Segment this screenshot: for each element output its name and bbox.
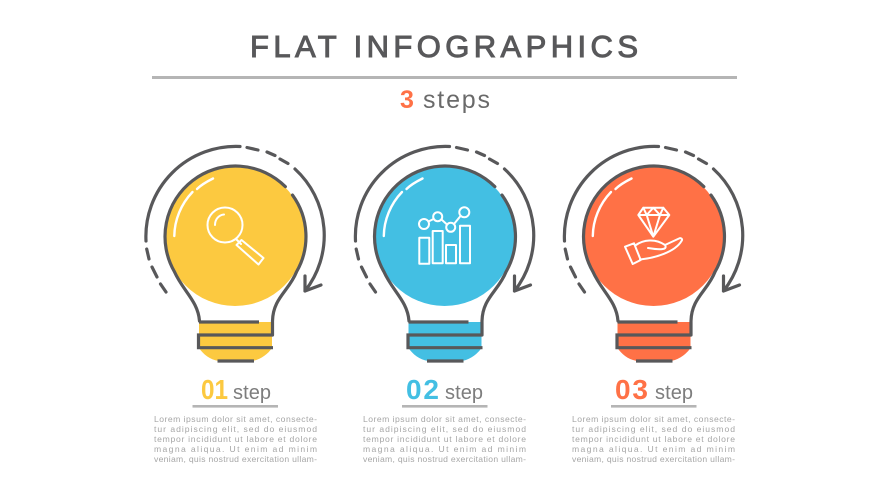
base fill — [199, 322, 272, 361]
screw thread — [617, 322, 692, 361]
step 3 label: step — [655, 382, 693, 404]
subtitle: steps — [423, 86, 490, 114]
glass fill — [165, 166, 305, 306]
glass highlight — [593, 178, 632, 236]
step 2 label: step — [445, 382, 483, 404]
step 2 text: Lorem ipsum dolor sit amet, consecte- — [363, 414, 526, 424]
step 1 text: tur adipiscing elit, sed do eiusmod — [154, 424, 317, 434]
bulb outline — [375, 166, 515, 335]
glass fill — [584, 166, 724, 306]
step 1 text: Lorem ipsum dolor sit amet, consecte- — [154, 414, 317, 424]
step 1 text: magna aliqua. Ut enim ad minim — [154, 444, 317, 454]
step 2 text: magna aliqua. Ut enim ad minim — [363, 444, 526, 454]
step 1 text: veniam, quis nostrud exercitation ullam- — [154, 454, 317, 464]
title rule — [152, 76, 737, 79]
step 1 label: step — [233, 382, 271, 404]
base fill — [408, 322, 482, 361]
step 3 text: tempor incididunt ut labore et dolore — [572, 434, 735, 444]
bulb outline — [584, 166, 724, 335]
screw thread — [408, 322, 482, 361]
icon: magnifier — [208, 208, 264, 264]
step 2 text — [363, 414, 526, 464]
step 3 text — [572, 414, 735, 464]
glass fill — [374, 166, 514, 306]
cycle arrow — [146, 146, 324, 292]
icon: chart — [419, 207, 470, 264]
step 3 number: 03 — [615, 374, 648, 405]
base fill — [618, 322, 690, 361]
screw thread — [198, 322, 273, 361]
step 1 rule — [192, 405, 278, 408]
step 1 number: 01 — [201, 374, 228, 405]
step 2 rule — [402, 405, 488, 408]
step 2 text: tempor incididunt ut labore et dolore — [363, 434, 526, 444]
step 2 number: 02 — [406, 374, 439, 405]
cycle arrow — [355, 146, 534, 292]
step 3 text: magna aliqua. Ut enim ad minim — [572, 444, 735, 454]
step 1 text — [154, 414, 317, 464]
step 2 text: veniam, quis nostrud exercitation ullam- — [363, 454, 526, 464]
subtitle: 3 — [400, 86, 414, 114]
step 3 text: Lorem ipsum dolor sit amet, consecte- — [572, 414, 735, 424]
cycle arrow — [564, 146, 743, 292]
glass highlight — [174, 178, 213, 236]
bulb outline — [165, 166, 306, 335]
step 1 bulb — [146, 146, 324, 361]
title: FLAT INFOGRAPHICS — [250, 29, 638, 64]
step 2 text: tur adipiscing elit, sed do eiusmod — [363, 424, 526, 434]
step 3 bulb — [564, 146, 743, 361]
step 2 bulb — [355, 146, 534, 361]
icon: diamond in hand — [625, 208, 682, 264]
step 3 text: tur adipiscing elit, sed do eiusmod — [572, 424, 735, 434]
glass highlight — [384, 178, 422, 236]
step 1 text: tempor incididunt ut labore et dolore — [154, 434, 317, 444]
step 3 rule — [611, 405, 696, 408]
step 3 text: veniam, quis nostrud exercitation ullam- — [572, 454, 735, 464]
